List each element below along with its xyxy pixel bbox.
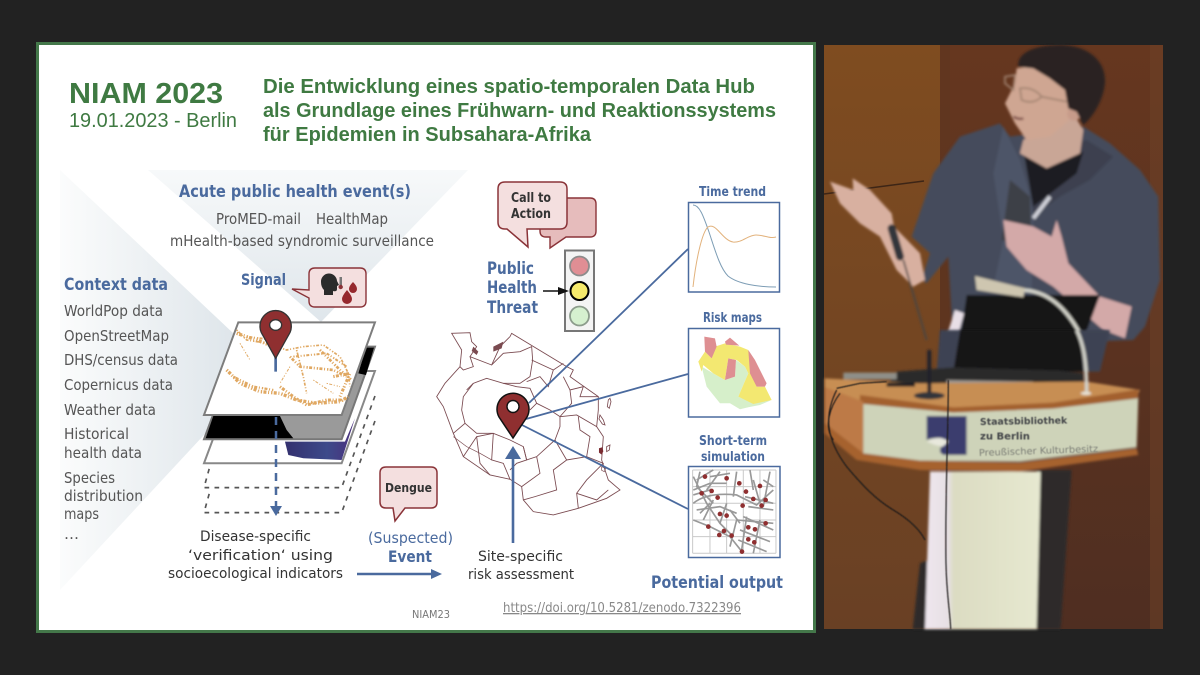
line chart (693, 205, 776, 287)
text block: context data list: Weather data (64, 401, 156, 419)
pillar (925, 472, 1041, 629)
panel: risk maps (688, 311, 780, 417)
text block: acute public health events: mHealth-based syndromic surveillance (170, 232, 434, 250)
hair (1018, 45, 1105, 125)
lectern sign text: zu Berlin (980, 431, 1030, 442)
header: conference name: 19.01.2023 - Berlin (69, 110, 237, 132)
label: public health threat (487, 259, 538, 318)
text block: context data list: distribution (64, 487, 143, 505)
microphone stem (903, 260, 927, 340)
lamp stem and base (1077, 330, 1087, 392)
lectern sign text: Staatsbibliothek (980, 415, 1068, 428)
text block: acute public health events (170, 182, 434, 250)
agent-based street map (693, 470, 776, 554)
zipper pull (1033, 197, 1050, 218)
right hand and forearm (1003, 220, 1132, 338)
text block: disease-specific verification: socioecological indicators (168, 566, 343, 582)
panel: short-term simulation (688, 434, 780, 558)
choropleth map (698, 337, 772, 409)
shirt (1023, 150, 1083, 207)
text block: site-specific risk assessment: Site-specific (478, 549, 563, 565)
header: talk title (263, 75, 776, 146)
arrow: event to site assessment (357, 569, 442, 579)
panel: speaker photo (824, 45, 1163, 629)
chart: stacked data layers (204, 311, 375, 513)
text block: disease-specific verification (168, 529, 343, 582)
microphone head (892, 228, 900, 257)
icon: head with thermometer and drops (321, 273, 357, 304)
text block: acute public health events: HealthMap (316, 210, 388, 228)
front bubble (498, 182, 567, 247)
header: talk title: Die Entwicklung eines spatio-temporalen Data Hub (263, 75, 755, 98)
layer: land cover (204, 347, 375, 439)
dashed placeholder layers (204, 396, 375, 513)
label: signal: Signal (241, 270, 286, 289)
jacket below laptop (937, 330, 1110, 372)
layer: species distribution (204, 371, 375, 463)
map: Tanzania districts with site pin (437, 333, 620, 515)
label: suspected event: (Suspected) (368, 529, 453, 547)
text block: context data list: health data (64, 444, 142, 462)
callout: call to action: Call to (511, 191, 551, 206)
lectern top (825, 378, 1140, 413)
panel: risk maps: Risk maps (703, 311, 762, 326)
background triangle: acute events (148, 170, 468, 322)
text block: context data list: Copernicus data (64, 376, 173, 394)
icon: traffic light (565, 250, 594, 331)
text block: context data list: DHS/census data (64, 351, 178, 369)
arrow: threat to light (543, 287, 569, 295)
panel: short-term simulation: simulation (701, 450, 765, 465)
country outline (437, 333, 620, 515)
label: public health threat: Threat (487, 298, 538, 318)
callout: dengue: Dengue (385, 480, 432, 495)
name badge (946, 310, 964, 340)
text block: context data list: maps (64, 505, 99, 523)
glasses (1005, 75, 1067, 102)
text block: context data list: Context data (64, 275, 168, 295)
header: talk title: als Grundlage eines Frühwarn- und Reaktionssystems (263, 99, 776, 122)
figure: speaker upper body (830, 45, 1160, 347)
lower edge (825, 423, 1138, 472)
label: public health threat: Public (487, 259, 534, 279)
footer: slide tag: NIAM23 (412, 609, 450, 621)
background triangle: context data (60, 170, 268, 590)
lectern sign text (979, 415, 1098, 459)
text block: disease-specific verification: ‘verification‘ using (188, 548, 333, 564)
text block: acute public health events: Acute public health event(s) (179, 182, 411, 202)
icon: site location pin (497, 393, 529, 438)
wood wall (824, 45, 1163, 629)
callout: call to action: Action (511, 207, 551, 222)
callout: dengue (380, 467, 437, 521)
footer: DOI link: https://doi.org/10.5281/zenodo.7322396 (503, 601, 741, 616)
logo (927, 416, 967, 455)
arrow: signal down to verification (270, 417, 282, 516)
lamp (1020, 290, 1083, 340)
callout: symptoms (292, 268, 366, 307)
icon: location pin (260, 311, 291, 358)
cables (828, 380, 951, 629)
label: public health threat: Health (487, 278, 537, 298)
text block: acute public health events: ProMED-mail (216, 210, 301, 228)
connector lines: site to outputs (522, 249, 688, 509)
text block: context data list: WorldPop data (64, 302, 163, 320)
laptop lid (960, 295, 1100, 340)
text block: site-specific risk assessment: risk assessment (468, 567, 574, 583)
jacket and sleeves (912, 123, 1160, 347)
front panel (863, 398, 1138, 462)
panel: short-term simulation: Short-term (699, 434, 767, 449)
neck and face (1020, 113, 1083, 168)
back bubble (540, 198, 596, 248)
text block: context data list: … (64, 525, 79, 543)
callout: call to action (498, 182, 596, 248)
side of lectern (825, 387, 863, 453)
text block: site-specific risk assessment (468, 549, 574, 583)
header: talk title: für Epidemien in Subsahara-Afrika (263, 123, 592, 146)
header: conference name: NIAM 2023 (69, 78, 223, 110)
slide panel (38, 44, 814, 632)
panel: time trend: Time trend (699, 185, 766, 200)
lectern sign text: Preußischer Kulturbesitz (979, 444, 1098, 459)
layer: population map (204, 322, 375, 415)
label: suspected event (368, 529, 453, 566)
label: potential output: Potential output (651, 573, 783, 593)
text block: context data list: Historical (64, 425, 129, 443)
laptop base (953, 330, 1083, 372)
text block: disease-specific verification: Disease-specific (200, 529, 311, 545)
panel: time trend (688, 185, 780, 292)
header: conference name (69, 78, 237, 132)
left hand and forearm (830, 178, 925, 287)
label: suspected event: Event (388, 547, 432, 566)
connector: signal line (272, 357, 280, 372)
text block: context data list (64, 275, 178, 543)
text block: context data list: OpenStreetMap (64, 327, 169, 345)
arrow: assessment up to site (505, 446, 521, 543)
islands (472, 342, 611, 472)
desk clutter (887, 367, 1083, 387)
legs (913, 470, 1072, 629)
mic stand (923, 350, 935, 395)
figure: lectern (825, 330, 1140, 629)
text block: context data list: Species (64, 469, 115, 487)
